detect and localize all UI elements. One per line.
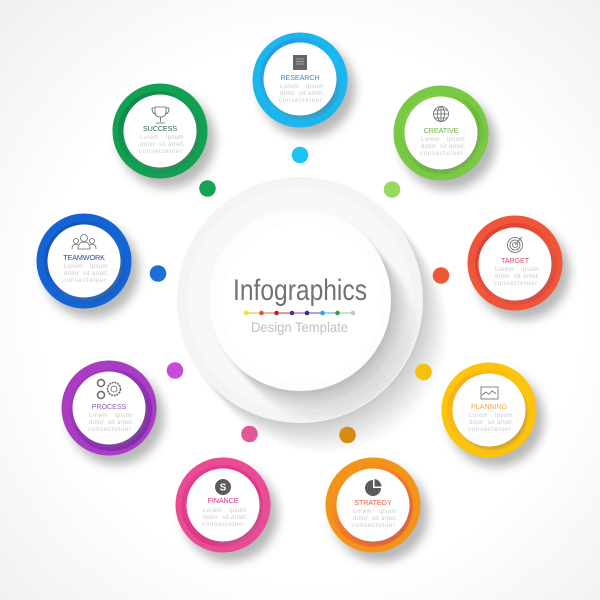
body text: consectetuer <box>88 426 132 433</box>
body text: amet, <box>449 143 466 150</box>
subtitle: Design Template <box>251 319 348 335</box>
body text: ipsum <box>447 136 465 143</box>
card: research <box>252 32 355 137</box>
body text: amet, <box>381 515 398 522</box>
label: TEAMWORK <box>63 253 105 262</box>
card: creative <box>394 86 496 190</box>
body text: Lorem <box>495 266 514 273</box>
body text: dolor <box>353 515 368 522</box>
body text: Lorem <box>64 263 83 270</box>
body text: ipsum <box>495 412 513 419</box>
body text: amet, <box>168 141 185 148</box>
icon: gears <box>98 380 120 398</box>
body text: amet, <box>92 270 109 277</box>
body text: sit <box>514 273 521 280</box>
body text: sit <box>440 143 447 150</box>
card: strategy <box>326 458 428 562</box>
body text: sit <box>372 515 379 522</box>
icon: document <box>293 55 307 70</box>
body text: consectetuer <box>202 521 246 528</box>
body text: amet, <box>117 419 134 426</box>
body text: amet, <box>308 90 325 97</box>
body text: consectetuer <box>63 277 107 284</box>
body text: sit <box>108 419 115 426</box>
label: STRATEGY <box>354 498 392 507</box>
body text: ipsum <box>115 412 133 419</box>
icon: globe <box>434 106 448 122</box>
body text: amet, <box>231 514 248 521</box>
body text: Lorem <box>469 412 488 419</box>
body text: Lorem <box>421 136 440 143</box>
body text: Lorem <box>203 507 222 514</box>
body text: dolor <box>421 143 436 150</box>
card: teamwork <box>36 214 139 318</box>
body text: ipsum <box>306 83 324 90</box>
icon: trophy <box>152 107 169 123</box>
card: target <box>468 216 570 320</box>
label: PROCESS <box>92 402 127 411</box>
body text: consectetuer <box>494 280 538 287</box>
body text: Lorem <box>353 508 372 515</box>
title: Infographics <box>233 274 367 307</box>
body text: ipsum <box>166 134 184 141</box>
body text: dolor <box>89 419 104 426</box>
body text: ipsum <box>90 263 108 270</box>
body text: ipsum <box>229 507 247 514</box>
icon: target <box>508 237 522 252</box>
body text: sit <box>299 90 306 97</box>
body text: amet, <box>497 419 514 426</box>
card: process <box>62 360 164 465</box>
label: SUCCESS <box>143 124 177 133</box>
connector dots <box>150 147 449 443</box>
body text: consectetuer <box>279 97 323 104</box>
body text: sit <box>222 514 229 521</box>
body text: sit <box>488 419 495 426</box>
label: PLANNING <box>471 402 507 411</box>
label: RESEARCH <box>280 73 320 82</box>
label: TARGET <box>501 256 530 265</box>
body text: dolor <box>64 270 79 277</box>
body text: consectetuer <box>468 426 512 433</box>
body text: dolor <box>140 141 155 148</box>
body text: dolor <box>280 90 295 97</box>
body text: Lorem <box>140 134 159 141</box>
colored dot line <box>244 311 355 315</box>
body text: ipsum <box>379 508 397 515</box>
body text: consectetuer <box>420 150 464 157</box>
card: finance <box>176 458 278 562</box>
body text: sit <box>159 141 166 148</box>
body text: Lorem <box>280 83 299 90</box>
body text: Lorem <box>89 412 108 419</box>
card: planning <box>442 362 544 467</box>
body text: dolor <box>203 514 218 521</box>
body text: ipsum <box>521 266 539 273</box>
icon: coin: S <box>220 482 227 494</box>
label: CREATIVE <box>424 126 459 135</box>
body text: consectetuer <box>139 148 183 155</box>
body text: amet, <box>523 273 540 280</box>
icon: pie chart <box>365 479 382 496</box>
body text: dolor <box>495 273 510 280</box>
body text: sit <box>83 270 90 277</box>
label: FINANCE <box>208 496 239 505</box>
body text: dolor <box>469 419 484 426</box>
icon: people <box>72 234 96 249</box>
card: success <box>112 84 215 188</box>
central plate <box>177 177 446 451</box>
body text: consectetuer <box>352 522 396 529</box>
icon: chart <box>481 387 498 399</box>
